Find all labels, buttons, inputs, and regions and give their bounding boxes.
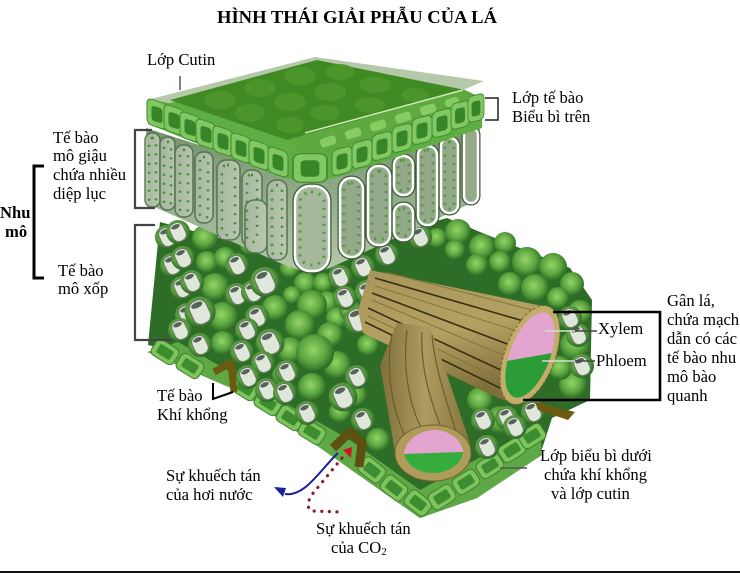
lower epidermis strip xyxy=(147,337,548,518)
bottom border xyxy=(0,571,740,573)
bracket: upper epidermis xyxy=(485,98,498,120)
arrow: CO2 xyxy=(308,458,342,512)
label: cutin: Lớp Cutin xyxy=(147,50,216,69)
label: vein: quanh xyxy=(667,386,708,405)
spongy cells xyxy=(155,219,594,459)
label: lower epidermis: và lớp cutin xyxy=(551,484,631,503)
leader: xylem xyxy=(545,330,597,332)
stoma right xyxy=(535,402,575,420)
label: stoma: Tế bào xyxy=(157,386,203,405)
xylem xyxy=(404,430,463,454)
label: palisade: Tế bào xyxy=(53,128,99,147)
label: phloem: Phloem xyxy=(596,351,647,370)
label: upper epidermis: Lớp tế bào xyxy=(512,88,583,107)
stoma opening xyxy=(343,447,352,458)
spongy mesophyll and lower epidermis base xyxy=(148,218,592,518)
label: water vapor: của hơi nước xyxy=(166,485,252,504)
label: mesophyll: Nhu xyxy=(0,203,30,222)
bracket: mesophyll xyxy=(34,166,44,278)
label: water vapor: Sự khuếch tán xyxy=(166,466,261,485)
label: palisade: diệp lục xyxy=(53,184,106,203)
leaf cross-section illustration xyxy=(145,57,594,518)
bracket: spongy xyxy=(135,225,172,340)
label: vein: Gân lá, xyxy=(667,291,715,310)
arrow: water vapor xyxy=(274,453,338,497)
stoma centre xyxy=(333,432,362,467)
label: lower epidermis: Lớp biểu bì dưới xyxy=(540,446,652,465)
leaf vein branch bundle xyxy=(380,323,471,481)
label: upper epidermis: Biểu bì trên xyxy=(512,107,591,126)
phloem xyxy=(404,452,463,473)
leader: cutin xyxy=(179,76,181,90)
leader: stoma xyxy=(213,383,233,399)
leader: lower epidermis xyxy=(500,467,527,469)
leaf vein main bundle xyxy=(358,270,560,405)
label: vein: dẫn có các xyxy=(667,329,737,348)
label: xylem: Xylem xyxy=(598,319,643,338)
label: palisade: mô giậu xyxy=(53,146,108,165)
label: vein: tế bào nhu xyxy=(667,348,737,367)
palisade mesophyll xyxy=(145,120,480,274)
label: CO2: 2 xyxy=(381,546,387,558)
label: stoma: Khí khổng xyxy=(157,405,228,424)
phloem xyxy=(505,353,552,398)
bracket: palisade xyxy=(135,130,155,208)
label: CO2: Sự khuếch tán xyxy=(316,519,411,538)
label: CO2: của CO xyxy=(331,538,381,557)
cuticle layer xyxy=(147,57,484,103)
label: vein: mô bào xyxy=(667,367,716,386)
stoma left xyxy=(214,363,234,392)
bracket: vein xyxy=(523,312,660,400)
label: vein: chứa mạch xyxy=(667,310,740,329)
label: spongy: Tế bào xyxy=(58,261,104,280)
label: spongy: mô xốp xyxy=(58,279,108,298)
leader: phloem xyxy=(542,360,595,362)
label: lower epidermis: chứa khí khổng xyxy=(544,465,647,484)
xylem xyxy=(495,306,565,404)
label: mesophyll: mô xyxy=(5,222,27,241)
upper epidermis xyxy=(147,57,484,184)
label: palisade: chứa nhiều xyxy=(53,165,127,184)
title: HÌNH THÁI GIẢI PHẪU CỦA LÁ xyxy=(217,6,498,27)
